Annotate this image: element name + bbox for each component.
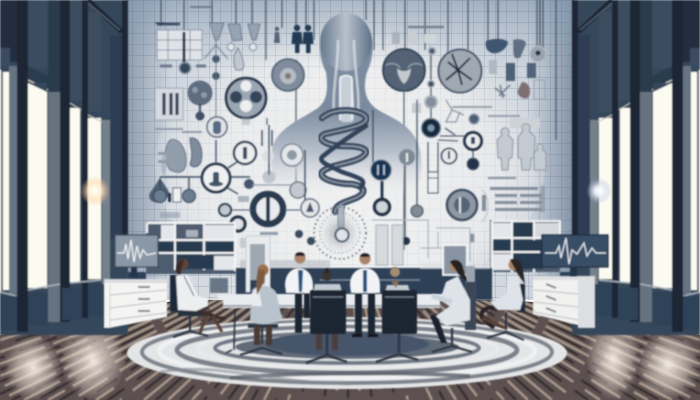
linked rings (438, 128, 482, 170)
chart panel (157, 24, 206, 74)
tube rectangle (428, 142, 438, 193)
left white cabinet (104, 279, 167, 328)
body outlines (497, 124, 546, 170)
lens flare: right (565, 178, 612, 204)
anatomical diagrams: left side (149, 6, 319, 248)
person: back-view chair center left (306, 268, 347, 363)
large grey ring (447, 190, 488, 222)
side wall and windows: right (572, 0, 700, 335)
right organs (392, 27, 546, 99)
node column (422, 48, 440, 138)
circular striped rug (127, 317, 567, 389)
conference table (210, 278, 470, 353)
left bookshelf (146, 222, 236, 274)
hanging lines on wall (161, 0, 556, 250)
hanging circles (370, 100, 423, 245)
helix spine (321, 110, 366, 231)
small grey rings (234, 125, 306, 215)
person: back-view chair center right (376, 267, 418, 362)
person: woman seen from behind (240, 264, 282, 355)
flasks (149, 177, 196, 202)
body silhouette with head and shoulders (272, 13, 422, 200)
small text blocks left (155, 6, 278, 248)
left ECG monitor (115, 235, 158, 277)
lower panels (372, 220, 474, 265)
large dark ring (219, 194, 319, 245)
lens flare: left (80, 176, 135, 206)
funnels (204, 23, 260, 120)
floor: striped wood planks (0, 300, 700, 400)
right door panel (443, 245, 475, 294)
ringed node (190, 140, 250, 194)
person: male doctor right (350, 253, 380, 337)
molecule and rules (412, 100, 540, 128)
data table (482, 177, 545, 212)
bar panel (155, 88, 183, 120)
lungs (161, 138, 202, 176)
anatomical diagrams: right side (370, 27, 546, 265)
person pictograms (155, 23, 314, 53)
right bookshelf (490, 220, 560, 272)
side wall and windows: left (0, 0, 128, 335)
dark wainscot band (127, 260, 575, 308)
back wall with grid (127, 0, 575, 300)
large ringed cell (226, 78, 266, 118)
person: seated woman left (170, 258, 225, 337)
neuron circle (438, 50, 482, 92)
person: woman seated right (430, 260, 476, 352)
organ capsule (207, 117, 227, 137)
tree diagram (188, 80, 212, 120)
right ECG monitor (542, 235, 608, 276)
left door panel (246, 236, 270, 294)
circular sample with grey center (272, 59, 304, 91)
right white cabinet (533, 276, 595, 328)
dotted halo with central node (314, 207, 366, 259)
dark uterus circle (383, 49, 425, 91)
person: male doctor left (285, 252, 313, 333)
person: woman seated far right (482, 259, 525, 340)
